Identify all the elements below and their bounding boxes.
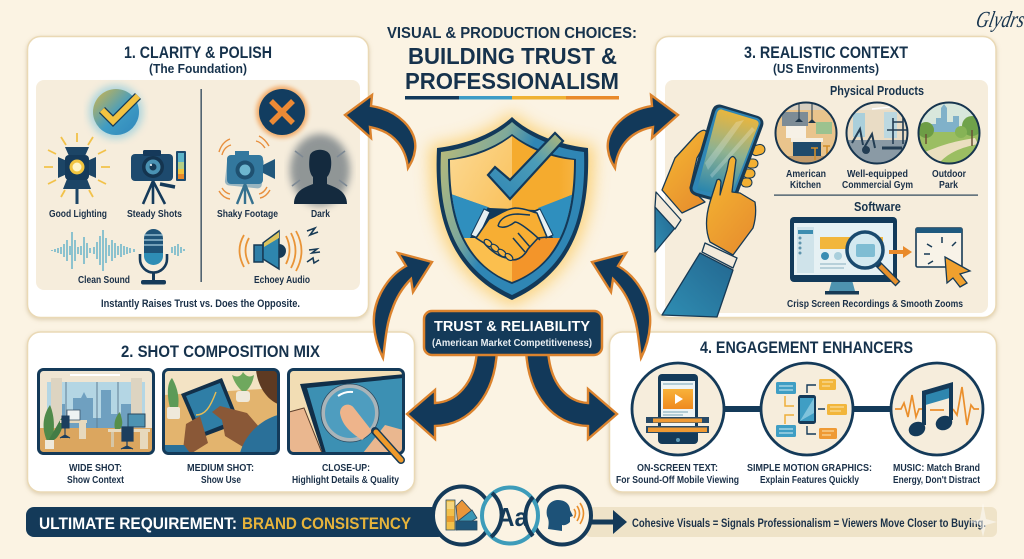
panel: 1 clarity and polish: 1. CLARITY & POLISH	[124, 43, 272, 62]
label: echoey audio: Echoey Audio	[254, 275, 310, 286]
title: BUILDING TRUST &	[408, 43, 617, 69]
waveform: clean sound	[52, 230, 184, 271]
shield glow	[430, 112, 594, 306]
badge: trust and reliability: (American Market Competitiveness)	[432, 338, 592, 349]
labels: shot types: MEDIUM SHOT:	[187, 463, 254, 474]
icon: music with waveform	[891, 363, 983, 455]
labels: engagement tools: ON-SCREEN TEXT:	[637, 463, 718, 474]
left hand	[662, 130, 707, 213]
icon: outdoor park scene	[918, 102, 982, 164]
image: close-up magnifier	[288, 370, 405, 460]
labels: shot types: WIDE SHOT:	[69, 463, 122, 474]
arrow: to panel 3	[608, 95, 678, 168]
labels: engagement tools: For Sound-Off Mobile Viewing	[616, 475, 739, 486]
icon: monitor with magnifier	[790, 217, 898, 294]
icon: central shield with handshake	[430, 112, 594, 306]
icon: colour swatch fan	[446, 500, 477, 530]
labels: shot types: Highlight Details & Quality	[292, 475, 399, 486]
phone	[690, 105, 763, 204]
icon: brand consistency circles	[433, 486, 591, 544]
title: VISUAL & PRODUCTION CHOICES:	[387, 25, 637, 42]
label: steady shots: Steady Shots	[127, 209, 182, 220]
label: clean sound: Clean Sound	[78, 275, 130, 286]
badge: trust and reliability: TRUST & RELIABILITY	[434, 318, 590, 335]
arrow: to panel 4	[526, 350, 617, 439]
cuffs	[471, 209, 490, 238]
arrow: to panel 2	[407, 350, 497, 439]
title	[387, 25, 637, 100]
badge: trust and reliability	[424, 311, 602, 355]
labels: engagement tools: SIMPLE MOTION GRAPHICS:	[747, 463, 872, 474]
icon: dark silhouette	[290, 134, 350, 206]
panel: 4 engagement enhancers: 4. ENGAGEMENT ENHANCERS	[700, 338, 913, 357]
labels: engagement tools: MUSIC: Match Brand	[893, 463, 980, 474]
arrow: to panel 1	[345, 95, 415, 168]
icon: good lighting	[44, 133, 110, 204]
labels: engagement tools: Explain Features Quickly	[760, 475, 859, 486]
panel: 3 realistic context: (US Environments)	[773, 62, 879, 76]
labels: shot types	[67, 463, 399, 486]
text: typography sample: Aa	[497, 502, 528, 532]
icon: X badge	[256, 86, 308, 138]
icon: motion graphics	[761, 363, 853, 455]
caption: software: Crisp Screen Recordings & Smooth Zooms	[787, 298, 963, 310]
title: PROFESSIONALISM	[405, 68, 619, 94]
icon: commercial gym scene	[846, 102, 908, 164]
icon: microphone	[140, 229, 167, 284]
labels: physical product settings: Commercial Gym	[842, 179, 913, 191]
right fingers behind phone	[741, 143, 766, 187]
image: wide shot office	[38, 370, 154, 454]
panel: 3 realistic context	[655, 36, 996, 318]
panel: 2 shot composition mix	[28, 332, 414, 492]
handshake	[476, 208, 547, 260]
banner: ultimate requirement: ULTIMATE REQUIREMENT:	[39, 515, 237, 533]
icon: check mark badge	[89, 85, 143, 139]
sparkle watermark	[969, 503, 997, 537]
labels: physical product settings: Kitchen	[790, 179, 821, 191]
right hand	[706, 156, 756, 255]
banner: ultimate requirement: BRAND CONSISTENCY	[242, 515, 411, 533]
icon: app window with cursor	[916, 228, 970, 287]
labels: physical product settings: American	[786, 168, 826, 180]
arrow: from panel 2 to shield	[374, 253, 432, 358]
panel: 2 shot composition mix: 2. SHOT COMPOSITION MIX	[121, 342, 321, 361]
image: medium shot tablet	[164, 370, 278, 454]
banner: cohesive visuals	[585, 507, 997, 537]
caption: trust contrast: Instantly Raises Trust vs. Does the Opposite.	[101, 298, 300, 310]
labels: shot types: Show Use	[201, 475, 241, 486]
left sleeve	[655, 207, 675, 252]
icon: shaky camera	[219, 136, 275, 204]
arrow: consistency to buying	[590, 510, 627, 534]
label: good lighting: Good Lighting	[49, 209, 107, 220]
icon: echoey speaker	[240, 228, 320, 271]
icon: speaking head	[547, 500, 584, 531]
panel: 1 clarity and polish: (The Foundation)	[149, 62, 247, 76]
labels: physical product settings: Well-equipped	[847, 168, 908, 180]
left cuff	[655, 192, 681, 229]
labels: shot types: CLOSE-UP:	[322, 463, 370, 474]
labels: physical product settings: Outdoor	[932, 168, 966, 180]
arrow: from panel 4 to shield	[592, 253, 650, 358]
icon: hands holding phone	[655, 105, 766, 317]
labels: engagement tools: Energy, Don't Distract	[893, 475, 981, 486]
labels: physical product settings	[786, 168, 966, 191]
icon: on-screen text phone	[632, 363, 724, 455]
arrow: zoom result	[889, 246, 912, 258]
panel: 1 clarity and polish	[28, 36, 368, 318]
shield check mark	[488, 133, 563, 199]
labels: shot types: Show Context	[67, 475, 125, 486]
labels: physical product settings: Park	[939, 179, 958, 191]
label: shaky footage: Shaky Footage	[217, 209, 278, 220]
label: dark: Dark	[311, 209, 330, 220]
banner: ultimate requirement	[26, 507, 446, 537]
panel: 3 realistic context: Software	[854, 200, 901, 214]
panel: 3 realistic context: Physical Products	[830, 84, 924, 98]
icon: steady camera on tripod	[131, 150, 186, 204]
labels: engagement tools	[616, 463, 981, 486]
right cuff	[702, 243, 737, 268]
panel: 4 engagement enhancers	[610, 332, 996, 492]
icon: American kitchen scene	[775, 102, 837, 166]
panel: 3 realistic context: 3. REALISTIC CONTEXT	[744, 43, 909, 62]
right sleeve	[662, 253, 733, 317]
